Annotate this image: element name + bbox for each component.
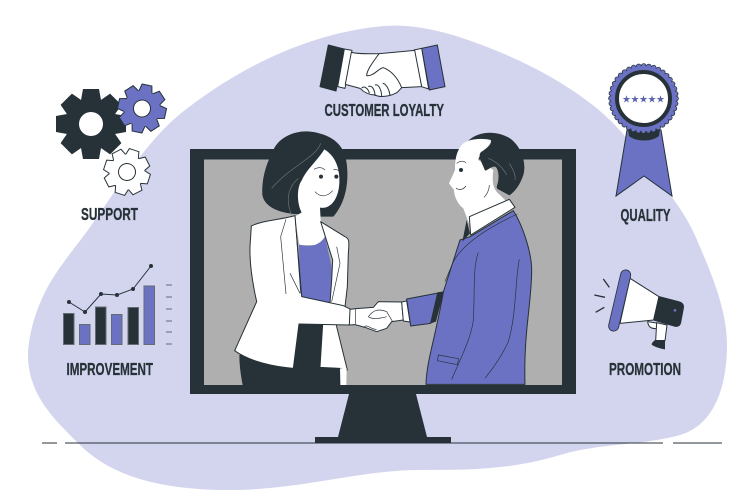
ground line bbox=[42, 442, 722, 444]
suit cuff band bbox=[430, 291, 444, 324]
monitor frame bbox=[190, 149, 576, 394]
man hair bbox=[468, 133, 524, 195]
shirt collar bbox=[469, 199, 515, 235]
suit seams and pocket bbox=[445, 214, 519, 379]
label: customer loyalty: CUSTOMER LOYALTY bbox=[324, 100, 444, 120]
tie bbox=[462, 220, 470, 242]
label: improvement: IMPROVEMENT bbox=[66, 359, 153, 379]
businessman arm and suit bbox=[407, 211, 532, 384]
dark gear bbox=[56, 89, 126, 159]
neck and face bbox=[295, 149, 339, 245]
white gear bbox=[98, 143, 156, 201]
businesswoman bbox=[235, 131, 532, 385]
hair bbox=[262, 131, 347, 217]
stars: ★★★★★ bbox=[622, 94, 665, 106]
purple gear bbox=[114, 80, 170, 137]
label: quality: QUALITY bbox=[620, 205, 671, 225]
monitor screen bbox=[204, 160, 562, 385]
chart: improvement bars bbox=[64, 264, 172, 344]
hair strands and face details bbox=[272, 143, 321, 215]
icon: quality ribbon bbox=[611, 66, 676, 196]
trousers bbox=[239, 353, 340, 385]
monitor bbox=[190, 149, 576, 443]
monitor stand bbox=[315, 394, 451, 443]
label: promotion: PROMOTION bbox=[609, 359, 681, 379]
label: support: SUPPORT bbox=[81, 204, 138, 224]
trend line bbox=[69, 266, 151, 312]
icon: megaphone bbox=[594, 275, 683, 349]
dark inner shirt bbox=[293, 323, 323, 368]
seal bbox=[611, 66, 676, 131]
top bbox=[299, 237, 332, 323]
ribbon knot bbox=[628, 129, 660, 140]
hand shake bbox=[349, 302, 403, 332]
man face bbox=[449, 139, 513, 226]
jacket right panel bbox=[321, 222, 349, 307]
icon: gears bbox=[56, 80, 170, 201]
jacket left bbox=[235, 216, 351, 368]
ribbon tails bbox=[616, 130, 672, 196]
white strip bbox=[340, 368, 347, 385]
icon: handshake bbox=[320, 45, 445, 97]
